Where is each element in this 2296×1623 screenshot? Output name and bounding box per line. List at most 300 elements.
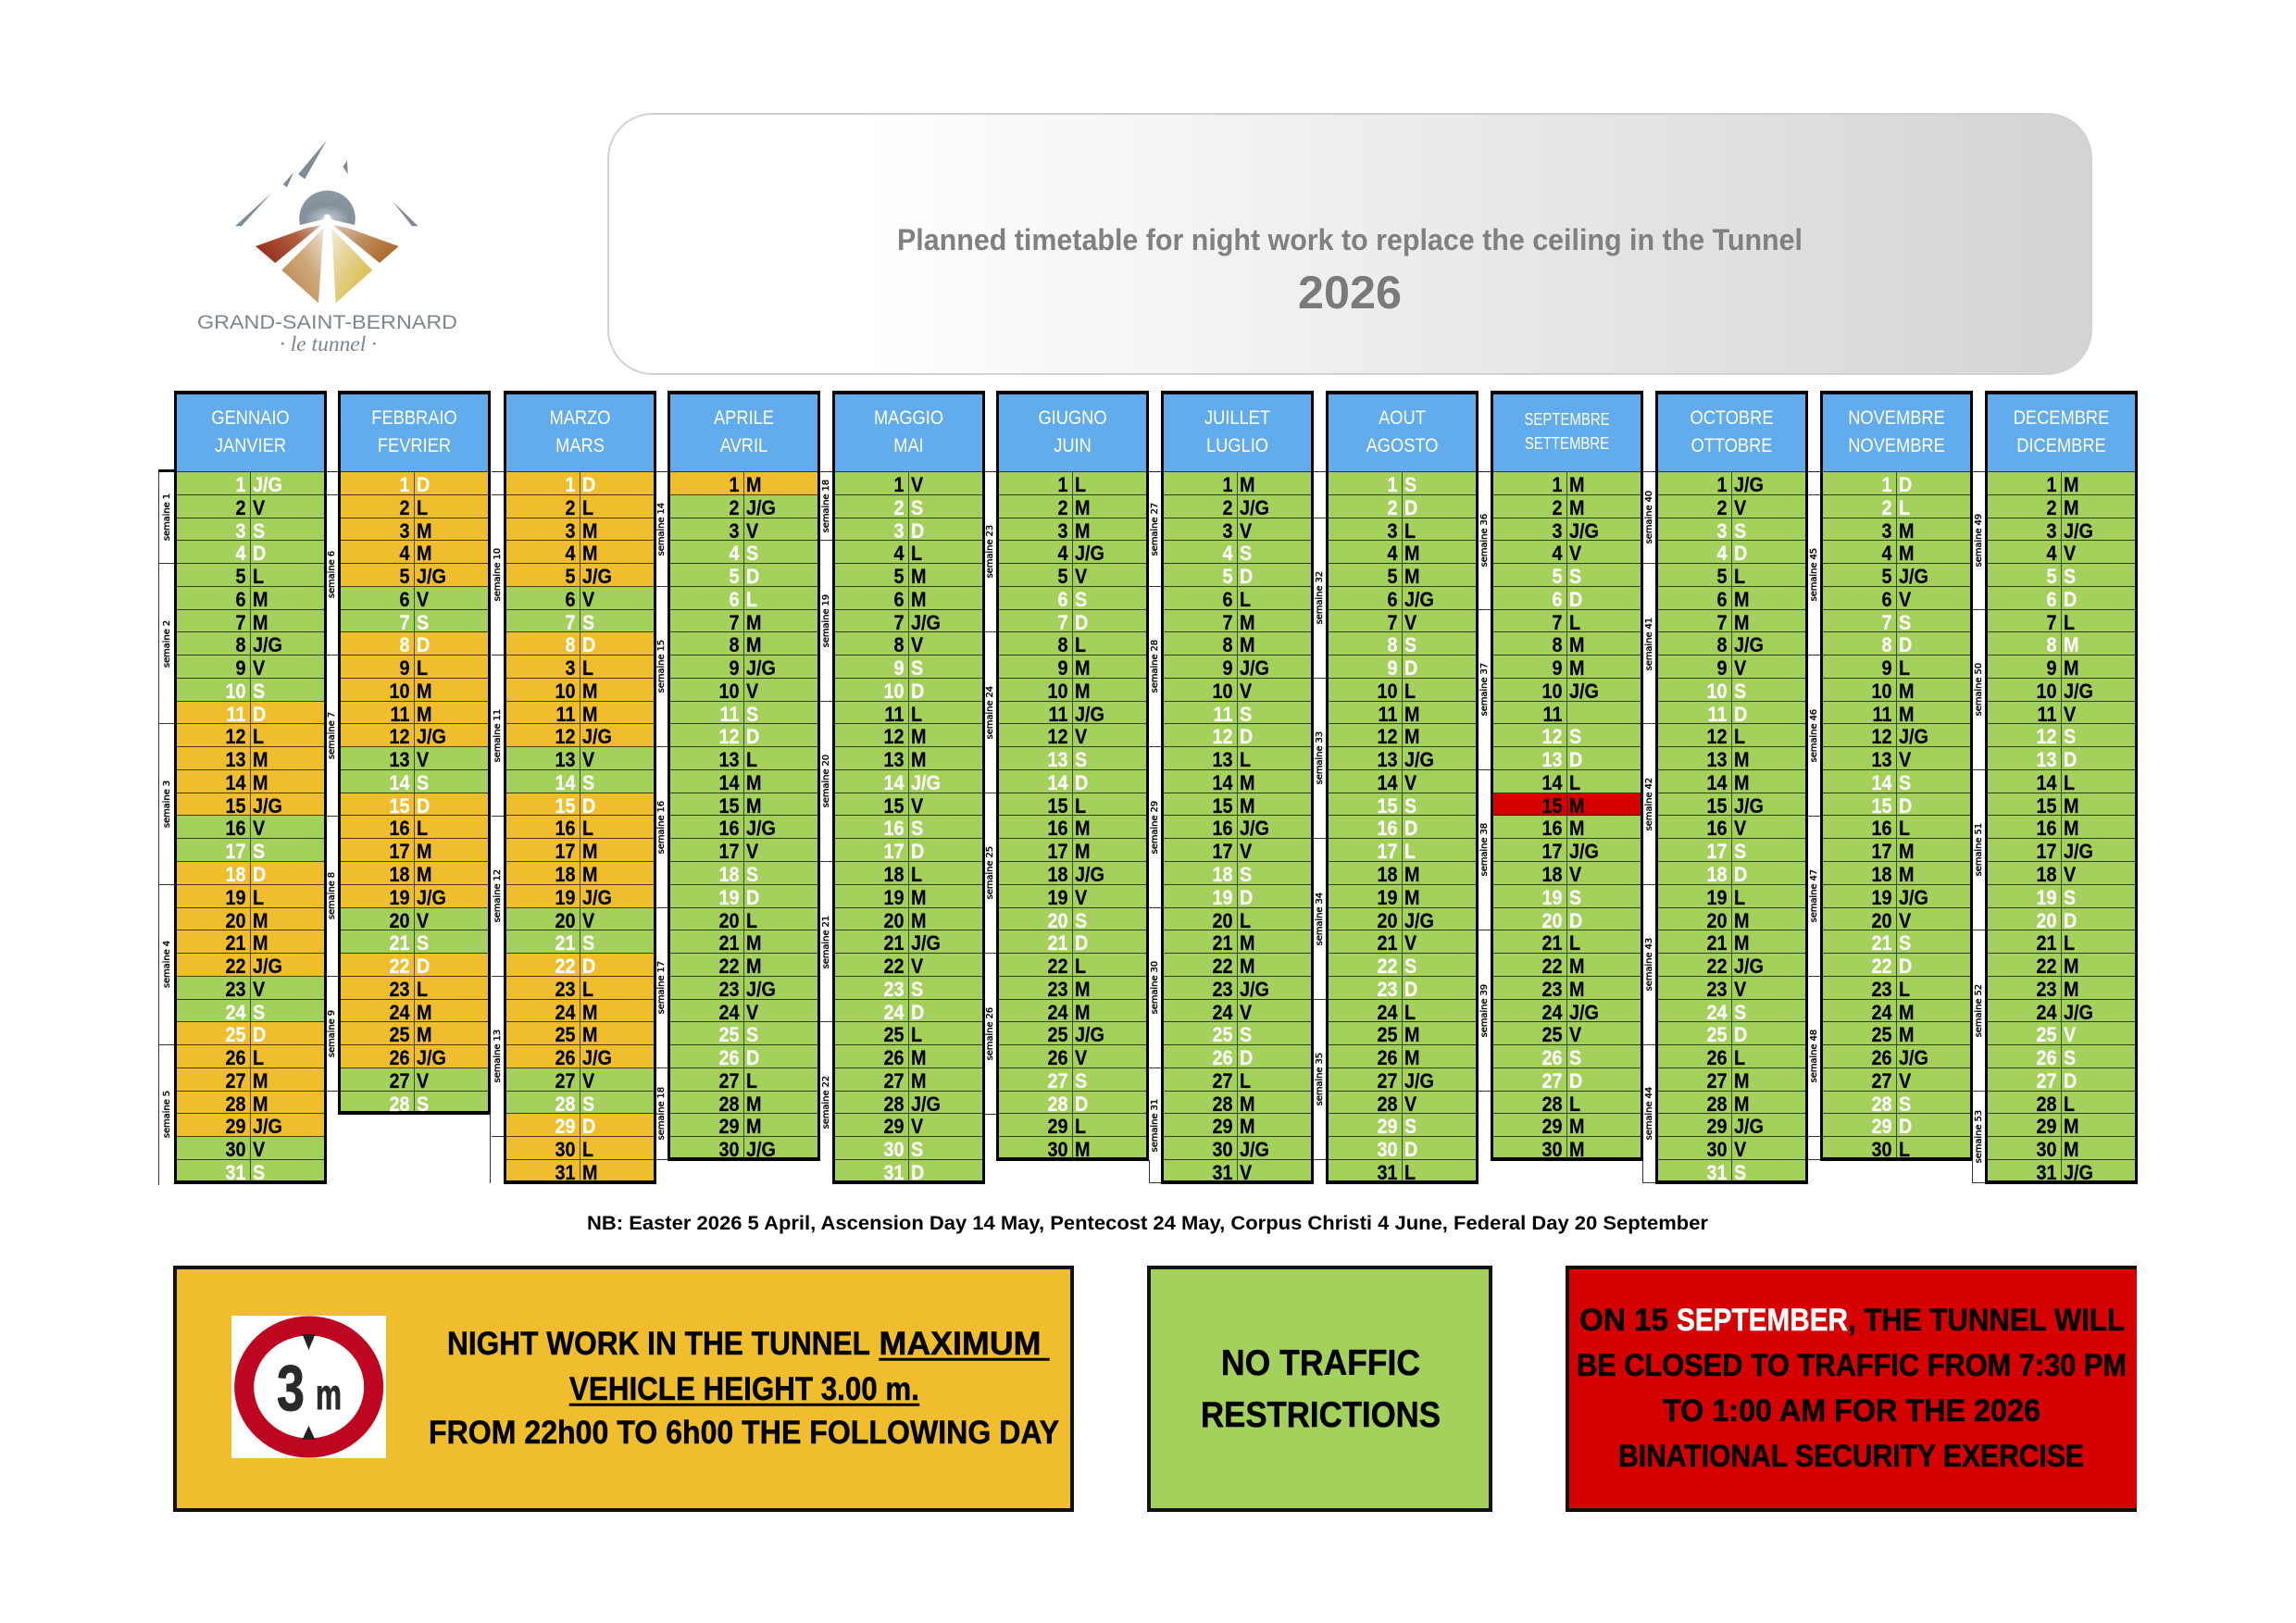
day rows: D [581,794,595,818]
day rows: J/G [1569,680,1599,703]
week labels: March: semaine 11 [493,709,503,762]
day rows: D [1075,1092,1088,1116]
day rows: 11 [1378,703,1397,726]
week labels: April [655,471,668,1185]
month header: SEPTEMBRE [1524,410,1610,429]
day rows: 18 [1871,863,1891,886]
day rows: V [1239,1161,1252,1184]
day rows: L [1239,909,1251,932]
day rows: 16 [1706,817,1727,840]
day rows: J/G [911,611,940,634]
day rows: D [1898,794,1912,818]
day rows: V [746,680,758,703]
day rows: J/G [1404,748,1433,771]
month: August [1326,391,1478,1184]
day rows: M [252,1092,268,1116]
day rows: S [1239,703,1252,726]
day rows: 3 [729,519,739,543]
day rows: J/G [252,794,281,818]
day rows: 6 [1387,588,1397,611]
day rows: D [1239,886,1253,909]
day rows: 11 [1543,703,1563,726]
week labels: September: semaine 37 [1479,663,1490,717]
day rows: D [1075,611,1088,634]
month header: JUIN [1054,435,1092,456]
day rows: S [581,771,594,794]
day rows: 10 [883,680,904,703]
icon: tunnel portal [299,191,356,225]
day rows: 14 [718,771,739,794]
day rows: 2 [399,496,409,519]
day rows: J/G [252,473,281,496]
day rows: V [417,1069,429,1092]
day rows: 5 [399,565,409,588]
day rows: D [1898,633,1912,656]
day rows: 30 [1871,1138,1891,1161]
day rows: D [581,473,595,496]
day rows: 9 [1552,656,1563,680]
day rows: V [1239,840,1252,863]
day rows: L [417,656,428,680]
day rows: 4 [1881,542,1891,565]
day rows: 8 [729,633,739,656]
day rows: L [1404,840,1416,863]
day rows: J/G [1733,794,1763,818]
day rows: D [581,955,595,978]
day rows: 3 [565,519,575,543]
day rows: V [1733,978,1746,1001]
day rows: 9 [1881,656,1891,680]
day rows: J/G [1404,588,1433,611]
day rows: 27 [389,1069,409,1092]
day rows: 16 [1871,817,1891,840]
day rows: L [581,978,593,1001]
month header: FEVRIER [378,435,451,456]
day rows: S [746,542,758,565]
day rows: 19 [225,886,245,909]
day rows: 19 [1706,886,1727,909]
day rows: M [1898,519,1914,543]
logo: Grand-Saint-Bernard tunnel [197,141,457,356]
day rows: M [1404,725,1419,748]
day rows: 21 [1377,931,1397,955]
day rows: M [2063,817,2078,840]
icon: 3 m height limit sign: m [316,1370,342,1418]
day rows: 18 [555,863,575,886]
day rows: 3 [1387,519,1397,543]
day rows: L [1569,1092,1580,1116]
week labels: November: semaine 47 [1809,869,1819,922]
day rows: D [1898,1115,1912,1138]
day rows: V [252,817,265,840]
day rows: V [911,473,923,496]
day rows: V [746,840,758,863]
day rows: 28 [555,1092,575,1116]
day rows: M [1733,748,1749,771]
day rows: 15 [883,794,904,818]
day rows: 7 [565,611,575,634]
day rows: 28 [1212,1092,1232,1116]
day rows: 20 [1212,909,1232,932]
day rows: 26 [1706,1046,1727,1069]
day rows: 8 [1222,633,1232,656]
day rows: 16 [1377,817,1397,840]
day rows: 28 [225,1092,245,1116]
day rows: S [1075,588,1087,611]
month header [341,394,488,472]
day rows: 25 [2036,1023,2056,1046]
day rows: 13 [883,748,904,771]
day rows: V [746,1001,758,1024]
week labels: August: semaine 33 [1315,731,1325,785]
day rows: 9 [1716,656,1727,680]
month header: AGOSTO [1366,435,1438,456]
day rows: J/G [1239,817,1268,840]
day rows: 3 [893,519,904,543]
week labels: April: semaine 15 [656,640,667,693]
day rows: M [1404,1023,1419,1046]
month header: GENNAIO [211,407,289,429]
day rows: 24 [1541,1001,1563,1024]
week labels: October: semaine 44 [1644,1087,1654,1141]
day rows: S [911,817,923,840]
day rows: J/G [911,931,940,955]
day rows: 19 [1541,886,1563,909]
day rows: S [2063,1046,2076,1069]
day rows: 7 [1716,611,1727,634]
day rows: M [581,519,597,543]
day rows: 3 [399,519,409,543]
day rows: 24 [2036,1001,2056,1024]
day rows: V [252,496,265,519]
day rows: V [1404,771,1416,794]
day rows: V [581,748,594,771]
month: April [667,391,820,1161]
week labels: June: semaine 23 [985,525,995,579]
month header: JANVIER [214,435,286,456]
day rows: 20 [555,909,575,932]
legend text: night work: MAXIMUM [880,1326,1041,1362]
day rows: 19 [1871,886,1891,909]
day rows: 26 [1871,1046,1891,1069]
legend text: night work [429,1326,1059,1451]
day rows: V [1404,931,1416,955]
day rows: L [1733,565,1745,588]
day rows: D [1733,1023,1747,1046]
day rows: 16 [718,817,739,840]
day rows: 2 [2046,496,2056,519]
closure text line 1 [1579,1303,2125,1338]
day rows: M [2063,656,2078,680]
day rows [670,472,817,1161]
day rows: 20 [718,909,739,932]
day rows [506,472,654,1184]
week labels: June [984,471,996,1185]
week labels: May: semaine 18 [821,480,831,532]
day rows: 25 [389,1023,409,1046]
day rows: V [1733,817,1746,840]
closure text line 2: BE CLOSED TO TRAFFIC FROM 7:30 PM [1577,1348,2127,1383]
day rows: L [1898,978,1910,1001]
month header: MARZO [549,407,610,429]
day rows: D [2063,909,2077,932]
day rows: 27 [1706,1069,1727,1092]
day rows: M [581,863,597,886]
day rows: 16 [1541,817,1563,840]
day rows: 12 [389,725,409,748]
day rows: S [1404,955,1416,978]
day rows: 11 [1872,703,1891,726]
day rows: M [1239,771,1254,794]
day rows: L [581,1138,593,1161]
week labels: February: semaine 7 [327,712,337,759]
day rows: 5 [2046,565,2056,588]
closure text line 1: SEPTEMBER [1677,1303,1848,1338]
week labels: October [1643,471,1655,1185]
day rows: M [581,703,597,726]
day rows: V [417,748,429,771]
day rows: 21 [1541,931,1563,955]
day rows: 31 [225,1161,245,1184]
day rows: S [1404,473,1416,496]
day rows: M [1569,794,1584,818]
day rows: L [252,565,264,588]
day rows: D [1075,771,1088,794]
day rows: 21 [555,931,575,955]
day rows: L [581,656,593,680]
day rows: 2 [1716,496,1727,519]
day rows: S [1404,633,1416,656]
day rows: 5 [1057,565,1068,588]
day rows: 14 [1871,771,1891,794]
day rows: M [417,1023,431,1046]
day rows: 5 [235,565,245,588]
day rows: S [1733,680,1746,703]
week labels: July: semaine 31 [1150,1099,1160,1152]
day rows: D [1733,703,1747,726]
day rows: M [1569,817,1584,840]
day rows: M [1733,1092,1749,1116]
day rows: D [911,1001,924,1024]
day rows: 15 [718,794,739,818]
week labels: October: semaine 40 [1644,491,1654,544]
day rows: J/G [1239,1138,1268,1161]
icon: mountain shards [235,141,418,226]
day rows: 30 [718,1138,739,1161]
day rows: 19 [1212,886,1232,909]
day rows: V [1404,611,1416,634]
day rows: D [1404,1138,1417,1161]
day rows: D [252,1023,266,1046]
day rows: 10 [555,680,575,703]
day rows: 27 [1871,1069,1891,1092]
day rows: 6 [565,588,575,611]
day rows: 26 [2036,1046,2056,1069]
day rows: 14 [2036,771,2056,794]
day rows: M [1898,863,1914,886]
day rows: L [417,817,428,840]
day rows: 30 [1541,1138,1563,1161]
day rows: L [1075,633,1086,656]
day rows: 6 [399,588,409,611]
day rows: J/G [746,978,775,1001]
day rows: S [911,496,923,519]
day rows: 23 [883,978,904,1001]
day rows: 10 [1377,680,1397,703]
week labels: December: semaine 53 [1974,1110,1984,1164]
day rows: J/G [417,1046,446,1069]
day rows: D [252,703,266,726]
day rows: V [1239,680,1252,703]
day rows: J/G [746,817,775,840]
day rows: L [1733,886,1745,909]
day rows: 5 [1881,565,1891,588]
month header [1822,394,1970,472]
day rows: 30 [1706,1138,1727,1161]
day rows: L [252,886,264,909]
day rows: M [1569,1115,1584,1138]
week labels: October: semaine 42 [1644,778,1654,830]
day rows: 15 [1541,794,1563,818]
day rows [177,472,324,1184]
day rows: M [911,588,926,611]
month header: OTTOBRE [1691,435,1772,456]
day rows: 20 [1541,909,1563,932]
day rows: D [1404,656,1417,680]
day rows: 15 [225,794,245,818]
month: June [996,391,1149,1161]
day rows: 5 [893,565,904,588]
day rows: J/G [1569,519,1599,543]
day rows: 10 [1871,680,1891,703]
day rows: L [911,542,922,565]
day rows: 14 [225,771,245,794]
day rows: S [581,611,594,634]
day rows: V [1733,1138,1746,1161]
day rows: J/G [2063,680,2092,703]
day rows: 31 [1377,1161,1397,1184]
day rows: 25 [718,1023,739,1046]
day rows: M [417,519,431,543]
day rows: M [1898,680,1914,703]
day rows: D [417,794,430,818]
day rows: 3 [1881,519,1891,543]
day rows: M [1404,565,1419,588]
day rows: 12 [555,725,575,748]
day rows: D [1404,817,1417,840]
day rows: 25 [1212,1023,1232,1046]
day rows: 26 [1047,1046,1068,1069]
icon: 3 m height limit sign: 3 [277,1352,305,1424]
day rows: 10 [1047,680,1068,703]
day rows: 7 [235,611,245,634]
month header [1657,394,1805,472]
day rows: 7 [1552,611,1563,634]
day rows: S [1569,886,1581,909]
month header: OCTOBRE [1690,407,1773,429]
day rows: 4 [893,542,904,565]
day rows: 18 [883,863,904,886]
week labels: February: semaine 8 [327,872,337,919]
day rows: S [1733,840,1746,863]
day rows: V [911,1115,923,1138]
day rows: J/G [581,886,611,909]
week labels: September: semaine 39 [1479,984,1490,1037]
month header: AOUT [1379,407,1425,429]
day rows: 29 [883,1115,904,1138]
day rows: D [746,1046,759,1069]
week labels: December: semaine 51 [1974,823,1984,877]
day rows: M [2063,978,2078,1001]
day rows: 29 [1047,1115,1068,1138]
day rows: S [1075,1069,1087,1092]
day rows: 13 [225,748,245,771]
day rows: D [911,1161,924,1184]
day rows: S [1075,909,1087,932]
day rows: M [2063,1138,2078,1161]
month header [835,394,981,472]
day rows: 29 [225,1115,245,1138]
day rows: 27 [225,1069,245,1092]
day rows: J/G [1239,656,1268,680]
day rows: M [1733,588,1749,611]
day rows: 5 [1222,565,1232,588]
week labels: November: semaine 46 [1809,709,1819,762]
day rows: 24 [883,1001,904,1024]
day rows: M [1898,840,1914,863]
day rows: 26 [225,1046,245,1069]
day rows: 17 [718,840,739,863]
day rows: 9 [729,656,739,680]
day rows: S [746,703,758,726]
day rows: V [417,588,429,611]
day rows: D [1569,909,1582,932]
week labels: July: semaine 29 [1150,801,1160,854]
day rows: 26 [389,1046,409,1069]
day rows: 9 [235,656,245,680]
month: May [831,391,985,1184]
day rows: 11 [391,703,409,726]
day rows: L [1898,1138,1910,1161]
day rows: J/G [1733,633,1763,656]
day rows: L [746,748,757,771]
day rows: 6 [2046,588,2056,611]
day rows: 17 [1212,840,1232,863]
day rows: 9 [399,656,409,680]
day rows: 25 [1541,1023,1563,1046]
day rows: 15 [1377,794,1397,818]
week labels: September: semaine 36 [1479,514,1490,567]
day rows: M [417,840,431,863]
day rows: D [1075,931,1088,955]
day rows: 12 [2036,725,2056,748]
day rows: J/G [1898,886,1928,909]
day rows: J/G [581,565,611,588]
day rows: 10 [389,680,409,703]
week labels: September [1479,471,1491,1185]
day rows: D [1404,496,1417,519]
day rows: M [911,565,926,588]
day rows: L [1898,496,1910,519]
day rows: 21 [1047,931,1068,955]
day rows: 5 [1387,565,1397,588]
day rows: V [252,656,265,680]
day rows: 5 [729,565,739,588]
month header: LUGLIO [1205,435,1268,456]
day rows: 22 [2036,955,2056,978]
day rows: M [746,611,761,634]
day rows: 8 [235,633,245,656]
